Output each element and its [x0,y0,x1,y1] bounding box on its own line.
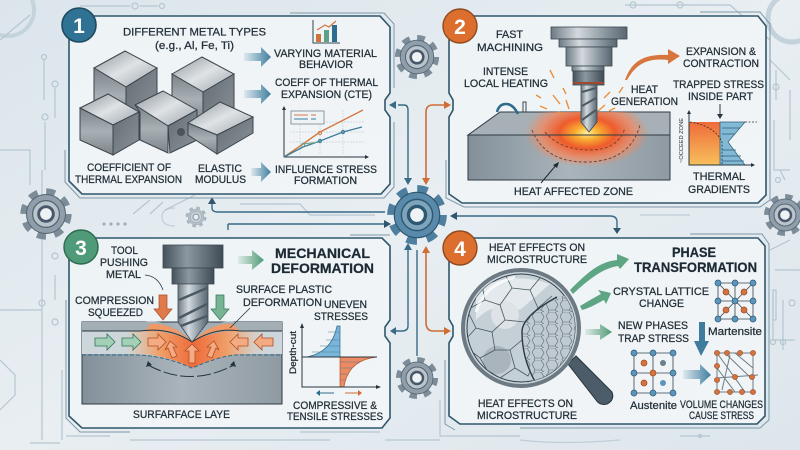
badge 2: 2 [454,16,466,39]
text: thermal gradients: THERMAL [693,171,745,183]
text: thermal gradients: GRADIENTS [688,184,750,196]
text: thermal gradients [688,171,750,196]
gear: centre hub [391,189,443,241]
heading: mechanical deformation: DEFORMATION [271,260,374,276]
text: expansion and contraction: CONTRACTION [683,58,759,70]
text: heat effects top: MICROSTRUCTURE [487,254,587,266]
heading: different metal types: DIFFERENT METAL TYPES [123,26,266,38]
arrow: to new phases [585,324,612,340]
heading: different metal types: (e.g., Al, Fe, Ti) [155,40,234,52]
label: austenite: Austenite [630,400,677,412]
text: CTE: COEFF OF THERMAL [275,77,378,89]
text: tool pushing metal [100,245,148,281]
text: compression squeezed: SQUEEZED [88,307,143,319]
text: trapped stress [673,79,764,103]
text: uneven stresses: UNEVEN [324,299,367,311]
leader: tool pushing [145,275,163,290]
badge 1 [62,8,96,42]
badge 3 [64,230,98,264]
badge 1: 1 [73,15,85,38]
gear: bottom centre [399,360,435,396]
text: trapped stress: TRAPPED STRESS [673,79,764,91]
text: compressive and tensile: TENSILE STRESSES [287,411,383,423]
text: crystal lattice change: CRYSTAL LATTICE [613,286,709,298]
text: influence stress formation: INFLUENCE STRESS [275,164,377,176]
panel 4: phase transformation [443,231,769,430]
gear: top centre [398,38,436,76]
down arrow: orange [154,295,172,320]
text: crystal lattice change: CHANGE [639,298,684,310]
text: CTE: EXPANSION (CTE) [281,89,372,101]
small axis label: ~OCCEED ZONE [679,118,685,163]
down arrow: martensite to volume [694,322,709,356]
magnifying glass with grains [463,270,613,404]
text: expansion and contraction: EXPANSION & [686,46,757,58]
text: volume changes: VOLUME CHANGES [680,399,763,411]
arrow: to mechanical deformation [238,250,264,270]
text: compression squeezed [75,295,154,319]
text: surface plastic deformation [236,284,332,309]
arrow: CTE [244,84,271,104]
connector arrows between panels [208,101,621,356]
panel 2: fast machining [443,9,770,207]
text: tool pushing metal: TOOL [111,245,138,257]
text: fast machining: FAST [496,29,523,41]
text: elastic modulus: MODULUS [195,174,246,186]
lattice: martensite [715,280,756,322]
text: intense local heating: INTENSE [483,66,528,78]
text: influence stress formation: FORMATION [294,175,357,187]
heading: phase transformation: PHASE [672,244,716,260]
spindle tool and drill [551,27,627,132]
text: heat generation: GENERATION [611,96,678,108]
lattice: austenite [631,350,676,396]
sparks [536,70,623,115]
text: heat effects top: HEAT EFFECTS ON [489,242,585,254]
text: elastic modulus [195,163,246,186]
label: martensite: Martensite [708,326,762,338]
badge 4: 4 [454,238,466,261]
text: surface plastic deformation: DEFORMATION [243,297,322,309]
badge 4 [443,231,477,265]
text: uneven stresses [314,299,368,323]
down arrow: green [211,295,229,320]
text: new phases trap stress: NEW PHASES [618,320,688,332]
text: CTE [275,77,378,101]
heat affected zone label and pointer [514,162,633,198]
mini bar chart icon [313,20,340,43]
text: expansion and contraction [683,46,759,70]
curved arrow: to crystal lattice [580,290,611,310]
text: fast machining [477,29,543,54]
text: varying material behaviour: BEHAVIOR [299,59,353,71]
text: compressive and tensile: COMPRESSIVE & [293,400,378,412]
text: uneven stresses: STRESSES [314,311,368,323]
text: heat effects bottom: HEAT EFFECTS ON [478,398,573,410]
text: coefficient of thermal expansion: COEFFICIENT OF [87,162,171,174]
heading: mechanical deformation: MECHANICAL [275,245,370,261]
arrow: expansion [625,49,680,80]
text: tool pushing metal: PUSHING [100,257,148,269]
text: compressive and tensile [287,400,383,423]
arrow: stress formation [251,162,271,182]
text: varying material behaviour: VARYING MATERIAL [274,48,377,60]
text: crystal lattice change [613,286,709,310]
text: new phases trap stress: TRAP STRESS [618,333,689,345]
text: tool pushing metal: METAL [106,269,141,281]
gear: left [24,192,68,236]
text: new phases trap stress [618,320,689,345]
arrow: varying behaviour [244,47,271,67]
right arrow: austenite to volume [683,364,711,385]
text: surface layer: SURFARFACE LAYE [133,409,230,421]
thermal gradient chart [687,104,757,167]
text: heat effects bottom [477,398,577,422]
text: fast machining: MACHINING [477,42,543,54]
text: intense local heating: LOCAL HEATING [464,78,548,90]
chart axis label: Depth-cut [288,330,298,374]
gear: right [767,197,800,233]
text: heat effects bottom: MICROSTRUCTURE [477,410,577,422]
CTE line chart [282,106,369,159]
stress chart [300,323,381,396]
deformed workpiece [82,321,282,404]
curved arrow: to phase transformation [570,254,629,294]
text: surface plastic deformation: SURFACE PLASTIC [236,284,332,296]
text: heat generation: HEAT [631,84,658,96]
metal blocks [80,51,253,155]
badge 2 [443,9,477,43]
text: influence stress formation [275,164,377,187]
lattice: distorted [714,350,758,395]
heat zone [527,112,647,166]
heading: mechanical deformation [271,245,374,276]
squeeze arrows [95,334,273,363]
panel 1: different metal types [62,8,394,198]
text: coefficient of thermal expansion: THERMAL EXPANSION [75,174,182,186]
badge 3: 3 [75,237,87,260]
leader: plastic deformation [230,308,250,328]
text: varying material behaviour [274,48,377,71]
text: heat effects top [487,242,587,266]
text: coefficient of thermal expansion [75,162,182,186]
text: trapped stress: INSIDE PART [688,91,753,103]
text: heat generation [611,84,678,108]
workpiece [468,102,670,180]
heading: phase transformation [634,244,757,275]
text: volume changes: CAUSE STRESS [689,410,754,422]
text: elastic modulus: ELASTIC [198,163,242,175]
heat affected zone label and pointer: HEAT AFFECTED ZONE [514,186,633,198]
tool [163,245,223,342]
gear: small faint [187,208,205,226]
panel 3: mechanical deformation [64,230,390,432]
text: intense local heating [464,66,548,90]
text: volume changes [680,399,763,422]
text: compression squeezed: COMPRESSION [75,295,154,307]
heading: different metal types [123,26,266,52]
heading: phase transformation: TRANSFORMATION [634,259,757,275]
